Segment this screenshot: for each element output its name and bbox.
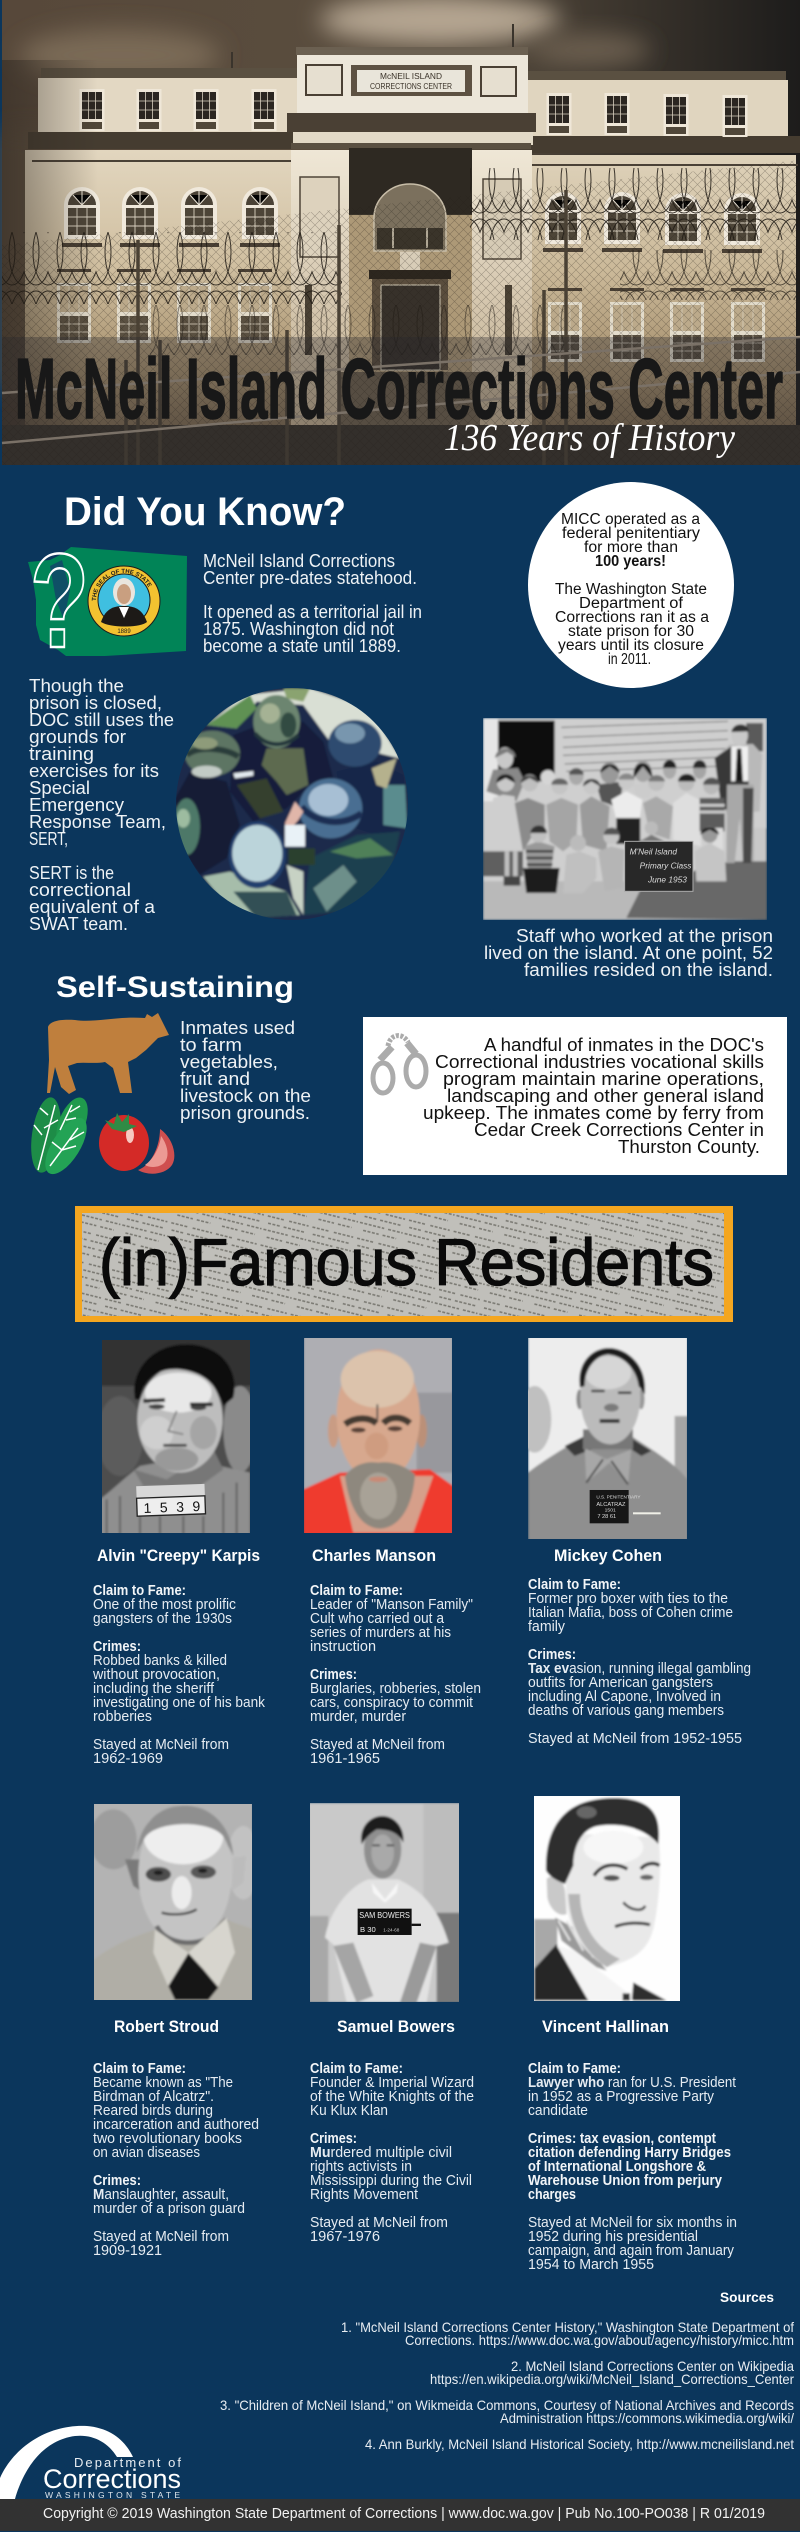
bio: Hallinan: of International Longshore & [528, 2159, 706, 2175]
bio: Hallinan: 1954 to March 1955 [528, 2257, 654, 2273]
bio: Karpis: Crimes: [93, 1639, 141, 1655]
text: farm: fruit and [180, 1069, 250, 1089]
bio: Cohen: Stayed at McNeil from 1952-1955 [528, 1731, 742, 1747]
callout circle: federal penitentiary: 100 years! [595, 553, 666, 570]
icon: handcuffs [373, 1036, 426, 1093]
text: SERT training: DOC still uses the [29, 710, 174, 730]
bio: Bowers: of the White Knights of the [310, 2089, 474, 2105]
numbered plate [136, 1484, 206, 1516]
left soldier [175, 772, 240, 875]
callout circle: federal penitentiary: Corrections ran it as a [555, 609, 709, 626]
bio: Karpis: 1962-1969 [93, 1751, 163, 1767]
name: Hallinan: Vincent Hallinan [542, 2017, 669, 2036]
icon: state seal: 1889 [117, 629, 131, 635]
banner: (in)Famous Residents: (in)Famous Residents [99, 1225, 714, 1299]
bio: Stroud: Reared birds during [93, 2103, 213, 2119]
caption: staff families [484, 926, 773, 980]
mugshot plate: 1501 [605, 1508, 616, 1514]
name: Karpis: Alvin "Creepy" Karpis [97, 1546, 260, 1565]
back row heads [596, 781, 623, 808]
bio: Hallinan [528, 2061, 737, 2273]
bio: Manson: murder, murder [310, 1709, 406, 1725]
ground [2, 425, 800, 465]
panel: vocational skills: program maintain marine operations, [443, 1069, 764, 1089]
text: SERT training: exercises for its [29, 761, 159, 781]
name plate [358, 1909, 421, 1935]
bio: Stroud: murder of a prison guard [93, 2201, 245, 2217]
text: farm: vegetables, [180, 1052, 278, 1072]
heading: Self-Sustaining: Self-Sustaining [56, 971, 294, 1004]
footer bar [0, 2499, 800, 2531]
bio: Bowers [310, 2061, 474, 2245]
callout circle: federal penitentiary: for more than [584, 539, 678, 556]
text: SERT training: Special [29, 778, 90, 798]
portrait: Robert Stroud [94, 1804, 252, 2000]
name: Bowers: Samuel Bowers [337, 2017, 455, 2036]
text: SERT training: Response Team, [29, 812, 166, 832]
top camo helmet [253, 695, 300, 748]
text: SERT training: prison is closed, [29, 693, 162, 713]
callout circle: federal penitentiary: state prison for 30 [568, 623, 694, 640]
sources [220, 2289, 794, 2452]
bio: Karpis: including the sheriff [93, 1681, 215, 1697]
bio: Hallinan: Warehouse Union from perjury [528, 2173, 722, 2189]
photo: children of McNeil Island [483, 718, 767, 920]
bio: Karpis: Claim to Fame: [93, 1583, 186, 1599]
chain-link fence [2, 160, 800, 465]
logo swoosh [0, 2426, 133, 2499]
caption: staff families: lived on the island. At one point, 52 [484, 943, 773, 963]
callout circle: federal penitentiary: in 2011. [608, 651, 651, 668]
caption: staff families: Staff who worked at the prison [516, 926, 773, 946]
mugshot plate: U.S. PENITENTIARY [596, 1494, 640, 1499]
bio: Bowers: Stayed at McNeil from [310, 2215, 448, 2231]
central tower and entrance: CORRECTIONS CENTER [370, 82, 452, 91]
bio: Manson: Stayed at McNeil from [310, 1737, 445, 1753]
panel: vocational skills: Thurston County. [618, 1137, 760, 1157]
bio: Manson [310, 1583, 481, 1767]
name: Manson: Charles Manson [312, 1546, 436, 1565]
bio: Bowers: Rights Movement [310, 2187, 418, 2203]
bottom left soldier [203, 872, 300, 918]
bio: Cohen: Claim to Fame: [528, 1577, 621, 1593]
logo: Department of Corrections: Department of [74, 2455, 181, 2470]
bio: Hallinan: Lawyer who ran for U.S. President [528, 2075, 736, 2091]
footer bar: Copyright © 2019 Washington State Department of Corrections | www.doc.wa.gov | Pub No.100-PO038 | R 01/2019 [43, 2505, 765, 2522]
bio: Manson: series of murders at his [310, 1625, 451, 1641]
portrait: Samuel Bowers [308, 1803, 462, 2003]
sources heading: Sources [720, 2289, 774, 2305]
banner: (in)Famous Residents [75, 1206, 733, 1322]
bio: Hallinan: Crimes: tax evasion, contempt [528, 2131, 716, 2147]
bio: Manson: Cult who carried out a [310, 1611, 445, 1627]
text: SERT training: Emergency [29, 795, 124, 815]
portrait: Charles Manson [303, 1336, 453, 1536]
caption: staff families: families resided on the island. [524, 960, 773, 980]
bio: Karpis: robberies [93, 1709, 152, 1725]
bio: Karpis: Stayed at McNeil from [93, 1737, 229, 1753]
bio: Manson: cars, conspiracy to commit [310, 1695, 473, 1711]
bio: Stroud: Stayed at McNeil from [93, 2229, 229, 2245]
bio: Bowers: Mississippi during the Civil [310, 2173, 472, 2189]
text: farm [180, 1018, 311, 1123]
center soldier torso [230, 722, 333, 822]
text: SERT training: equivalent of a [29, 897, 156, 917]
bottom right soldier [303, 832, 400, 915]
text: farm: livestock on the [180, 1086, 311, 1106]
icon: state seal [88, 566, 160, 636]
name plate: 1-24-68 [383, 1927, 400, 1932]
panel: vocational skills: Cedar Creek Corrections Center in [474, 1120, 764, 1140]
bio: Hallinan: in 1952 as a Progressive Party [528, 2089, 715, 2105]
icon: leafy greens [27, 1093, 95, 1181]
bio: Karpis: One of the most prolific [93, 1597, 236, 1613]
bio: Karpis: investigating one of his bank [93, 1695, 266, 1711]
panel: vocational skills: landscaping and other general island [447, 1086, 764, 1106]
hand and map [285, 802, 303, 832]
text: pre-dates statehood: Center pre-dates statehood. [203, 568, 417, 588]
sign text: McNEIL ISLAND [380, 72, 442, 81]
right soldier [337, 762, 408, 835]
bio: Bowers: Murdered multiple civil [310, 2145, 452, 2161]
bio: Karpis [92, 1583, 266, 1767]
standing row [492, 794, 516, 802]
chalkboard: M'Neil Island [630, 847, 677, 857]
logo: Department of Corrections: WASHINGTON STATE [45, 2490, 180, 2500]
bio: Manson: 1961-1965 [310, 1751, 380, 1767]
mugshot plate: 7 28 61 [597, 1514, 616, 1520]
text: SERT training: Though the [29, 676, 124, 696]
bio: Manson: instruction [310, 1639, 376, 1655]
bio: Hallinan: citation defending Harry Bridges [528, 2145, 731, 2161]
numbered plate: 1539 [143, 1498, 201, 1516]
bio: Stroud: Claim to Fame: [93, 2061, 186, 2077]
text: pre-dates statehood: 1875. Washington did not [203, 619, 394, 639]
text: SERT training: SERT, [29, 829, 68, 849]
chalkboard: June 1953 [647, 875, 687, 885]
name: Cohen: Mickey Cohen [554, 1546, 662, 1565]
bio: Cohen: including Al Capone, Involved in [528, 1689, 721, 1705]
bio: Cohen: Italian Mafia, boss of Cohen crime [528, 1605, 733, 1621]
bio: Bowers: rights activists in [310, 2159, 412, 2175]
text: pre-dates statehood: become a state until 1889. [203, 636, 401, 656]
bio: Stroud: 1909-1921 [93, 2243, 162, 2259]
right wing [528, 71, 800, 445]
left wing [25, 68, 300, 440]
text: farm: to farm [180, 1035, 242, 1055]
text: SERT training: SWAT team. [29, 914, 128, 934]
bio: Cohen: Former pro boxer with ties to the [528, 1591, 728, 1607]
bio: Cohen: Tax evasion, running illegal gambling [528, 1661, 751, 1677]
logo: Department of Corrections: Corrections [43, 2464, 181, 2494]
front row [525, 841, 555, 868]
mugshot plate: ALCATRAZ [596, 1502, 626, 1508]
bio: Stroud: on avian diseases [93, 2145, 200, 2161]
icon: cow [47, 1013, 169, 1094]
bio: Hallinan: charges [528, 2187, 576, 2203]
bio: Bowers: Founder & Imperial Wizard [310, 2075, 474, 2091]
bio: Stroud: Crimes: [93, 2173, 141, 2189]
panel: vocational skills: A handful of inmates in the DOC's [484, 1035, 764, 1055]
callout circle: federal penitentiary: Department of [579, 595, 684, 612]
panel: vocational skills: upkeep. The inmates come by ferry from [423, 1103, 764, 1123]
callout circle: federal penitentiary: federal penitentiary [562, 525, 700, 542]
name: Stroud: Robert Stroud [114, 2017, 219, 2036]
photo: SERT team in circle [170, 685, 415, 925]
text: farm: Inmates used [180, 1018, 295, 1038]
text: pre-dates statehood: It opened as a territorial jail in [203, 602, 422, 622]
bio: Hallinan: candidate [528, 2103, 588, 2119]
callout circle: federal penitentiary: years until its closure [558, 637, 704, 654]
bio: Hallinan: campaign, and again from January [528, 2243, 735, 2259]
bio: Hallinan: Stayed at McNeil for six months in [528, 2215, 737, 2231]
portrait: Alvin Karpis [102, 1340, 250, 1533]
razor wire coils [2, 168, 800, 355]
central tower and entrance [287, 47, 536, 440]
bio: Stroud: incarceration and authored [93, 2117, 259, 2133]
name plate: SAM BOWERS [359, 1910, 410, 1920]
bio: Manson: Claim to Fame: [310, 1583, 403, 1599]
text: farm: prison grounds. [180, 1103, 310, 1123]
chalkboard: Primary Class [640, 861, 691, 871]
bio: Manson: Crimes: [310, 1667, 357, 1683]
bio: Karpis: without provocation, [92, 1667, 220, 1683]
bio: Cohen: deaths of various gang members [528, 1703, 724, 1719]
bio: Stroud: Became known as "The [93, 2075, 233, 2091]
portrait: Vincent Hallinan [530, 1794, 685, 2004]
header photo: prison building with fence [2, 0, 800, 465]
bio: Cohen: outfits for American gangsters [528, 1675, 713, 1691]
translucent title band [2, 337, 800, 465]
center helmet [299, 778, 362, 838]
portrait: Mickey Cohen [518, 1336, 688, 1541]
callout circle: federal penitentiary: MICC operated as a [561, 511, 700, 528]
text: SERT training [29, 676, 174, 934]
text: pre-dates statehood [203, 551, 422, 656]
bio: Bowers: Ku Klux Klan [310, 2103, 388, 2119]
bio: Bowers: Crimes: [310, 2131, 357, 2147]
bio: Manson: Leader of "Manson Family" [310, 1597, 473, 1613]
icon: tomato [99, 1113, 174, 1174]
panel: vocational skills: Correctional industries vocational skills [435, 1052, 764, 1072]
bio: Hallinan: 1952 during his presidential [528, 2229, 698, 2245]
left camo helmet [185, 731, 240, 776]
man in suit [720, 742, 762, 812]
bio: Stroud: two revolutionary books [93, 2131, 242, 2147]
mugshot plate [590, 1490, 661, 1523]
bio: Stroud: Manslaughter, assault, [93, 2187, 229, 2203]
logo: Department of Corrections [0, 2426, 181, 2500]
woman [486, 768, 525, 801]
icon: question mark: ? [30, 527, 89, 676]
bio: Cohen: Crimes: [528, 1647, 576, 1663]
text: pre-dates statehood: McNeil Island Corrections [203, 551, 395, 571]
subtitle: 136 Years of History [444, 417, 735, 459]
bio: Stroud: Birdman of Alcatrz". [93, 2089, 214, 2105]
icon: state seal: THE SEAL OF THE STATE [92, 568, 152, 601]
bio: Cohen [528, 1577, 751, 1747]
callout circle: federal penitentiary: The Washington State [555, 581, 707, 598]
text: SERT training: training [29, 744, 94, 764]
bio: Stroud [93, 2061, 259, 2259]
bio: Hallinan: Claim to Fame: [528, 2061, 621, 2077]
bio: Karpis: gangsters of the 1930s [93, 1611, 232, 1627]
text: SERT training: grounds for [29, 727, 126, 747]
panel: vocational skills [363, 1017, 787, 1175]
text: SERT training: SERT is the [29, 863, 114, 883]
heading: Did You Know?: Did You Know? [64, 490, 346, 534]
bio: Cohen: family [528, 1619, 566, 1635]
callout circle: federal penitentiary [528, 482, 734, 688]
bio: Karpis: Robbed banks & killed [93, 1653, 227, 1669]
icon: Washington state flag with question mark [28, 527, 187, 676]
bio: Bowers: Claim to Fame: [310, 2061, 403, 2077]
text: SERT training: correctional [29, 880, 131, 900]
bio: Manson: Burglaries, robberies, stolen [310, 1681, 481, 1697]
bio: Bowers: 1967-1976 [310, 2229, 380, 2245]
name plate: B 30 [360, 1925, 376, 1934]
chalkboard [625, 841, 693, 891]
